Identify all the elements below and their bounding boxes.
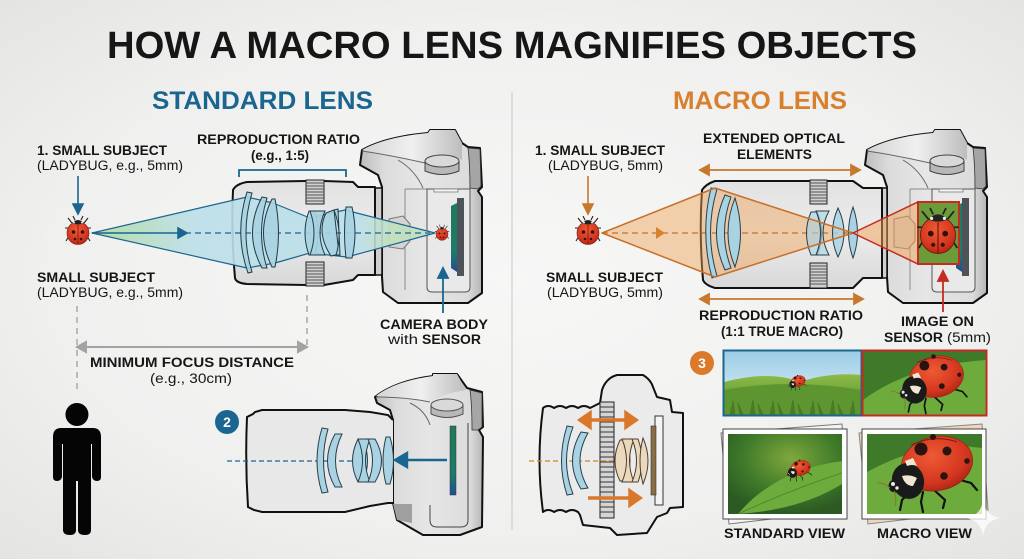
- panel: view comparison: [690, 350, 988, 541]
- arrow: image on sensor: [938, 271, 948, 312]
- label: small subject bottom macro: SMALL SUBJECT: [546, 270, 664, 285]
- image on sensor: [917, 202, 959, 264]
- label: small subject bottom: SMALL SUBJECT: [37, 270, 156, 285]
- image: macro view leaf: [863, 351, 986, 415]
- light cone macro: [602, 188, 853, 277]
- panel: standard lens: [37, 87, 488, 535]
- label: reproduction ratio: REPRODUCTION RATIO: [197, 132, 360, 147]
- label: small subject top macro: 1. SMALL SUBJECT: [535, 143, 666, 158]
- label: small subject top macro: (LADYBUG, 5mm): [548, 158, 663, 173]
- photo: macro view: [859, 424, 988, 524]
- sensor tan: [651, 416, 663, 505]
- lens elements tan: [615, 438, 648, 484]
- lens barrel: [232, 180, 382, 286]
- camera body macro: [865, 130, 987, 303]
- focus ring: [600, 402, 614, 518]
- arrow: to ladybug macro: [583, 176, 593, 214]
- icon: ladybug macro: [575, 216, 601, 244]
- arrow: lens movement: [395, 453, 447, 467]
- lens elements lower: [317, 428, 394, 493]
- heading: macro lens: MACRO LENS: [673, 87, 847, 115]
- arrow: double focus movement: [580, 413, 636, 427]
- badge 3: 3: [698, 355, 706, 371]
- label: camera body: CAMERA BODY: [380, 317, 488, 332]
- camera body lower: [375, 374, 483, 535]
- frame red: [862, 350, 986, 416]
- icon: ladybug on sensor: [435, 225, 449, 240]
- label: small subject top: (LADYBUG, e.g., 5mm): [37, 158, 183, 173]
- panel: macro focusing diagram: [529, 375, 683, 535]
- icon: sparkle: [965, 500, 1001, 536]
- cone edges macro: [602, 188, 853, 277]
- arrow: reproduction ratio macro: [700, 294, 863, 304]
- lens barrel macro: [701, 180, 887, 288]
- lens elements blue: [562, 426, 588, 495]
- badge 3: [690, 351, 714, 375]
- label: camera body: with: [387, 332, 418, 347]
- image cone macro: [853, 202, 918, 264]
- bracket: reproduction ratio: [239, 170, 346, 177]
- arrow: forward movement: [588, 491, 640, 505]
- arrowhead macro: [656, 227, 665, 239]
- label: reproduction ratio macro: REPRODUCTION RATIO: [699, 308, 863, 323]
- label: macro view: MACRO VIEW: [877, 526, 972, 541]
- label: extended optical elements: ELEMENTS: [737, 147, 812, 162]
- arrow: optical axis: [92, 228, 187, 238]
- panel: macro lens: [535, 87, 991, 345]
- label: image on sensor: (5mm): [947, 330, 991, 345]
- label: extended optical elements: EXTENDED OPTICAL: [703, 131, 845, 146]
- lens elements macro: [706, 188, 858, 278]
- photo: standard view: [721, 424, 847, 524]
- badge 2: 2: [223, 414, 231, 430]
- lens elements: [241, 192, 355, 273]
- arrow: to ladybug: [73, 176, 83, 214]
- axis macro: [602, 232, 850, 234]
- camera outline: [540, 375, 683, 535]
- label: image on sensor: IMAGE ON: [901, 314, 974, 329]
- arrow: to sensor: [438, 268, 448, 313]
- label: image on sensor: SENSOR: [884, 330, 943, 345]
- label: small subject bottom macro: (LADYBUG, 5mm): [547, 285, 663, 300]
- arrow: minimum focus distance: [77, 342, 307, 352]
- label: minimum focus distance: MINIMUM FOCUS DISTANCE: [90, 354, 294, 370]
- arrow: extended elements: [700, 165, 860, 175]
- label: camera body: SENSOR: [422, 332, 481, 347]
- light cone: [92, 197, 435, 268]
- image: standard view landscape: [724, 351, 861, 415]
- label: reproduction ratio macro: (1:1 TRUE MACRO): [721, 324, 843, 339]
- sensor lower: [450, 426, 456, 495]
- lens barrel lower: [246, 410, 393, 512]
- icon: ladybug: [65, 216, 91, 244]
- axis lower: [227, 460, 352, 462]
- label: minimum focus distance: (e.g., 30cm): [150, 371, 232, 386]
- heading: standard lens: STANDARD LENS: [152, 87, 373, 115]
- frame blue: [724, 350, 862, 416]
- label: reproduction ratio: (e.g., 1:5): [251, 148, 309, 163]
- label: standard view: STANDARD VIEW: [724, 526, 845, 541]
- label: small subject bottom: (LADYBUG, e.g., 5mm): [37, 285, 183, 300]
- label: small subject top: 1. SMALL SUBJECT: [37, 143, 168, 158]
- badge 2: [215, 410, 239, 434]
- camera body: [360, 130, 482, 303]
- axis: dashed: [185, 232, 430, 234]
- icon: person: [53, 403, 101, 535]
- axis: [529, 460, 613, 462]
- title: HOW A MACRO LENS MAGNIFIES OBJECTS: [107, 25, 917, 67]
- panel: standard lens focusing: [215, 374, 483, 535]
